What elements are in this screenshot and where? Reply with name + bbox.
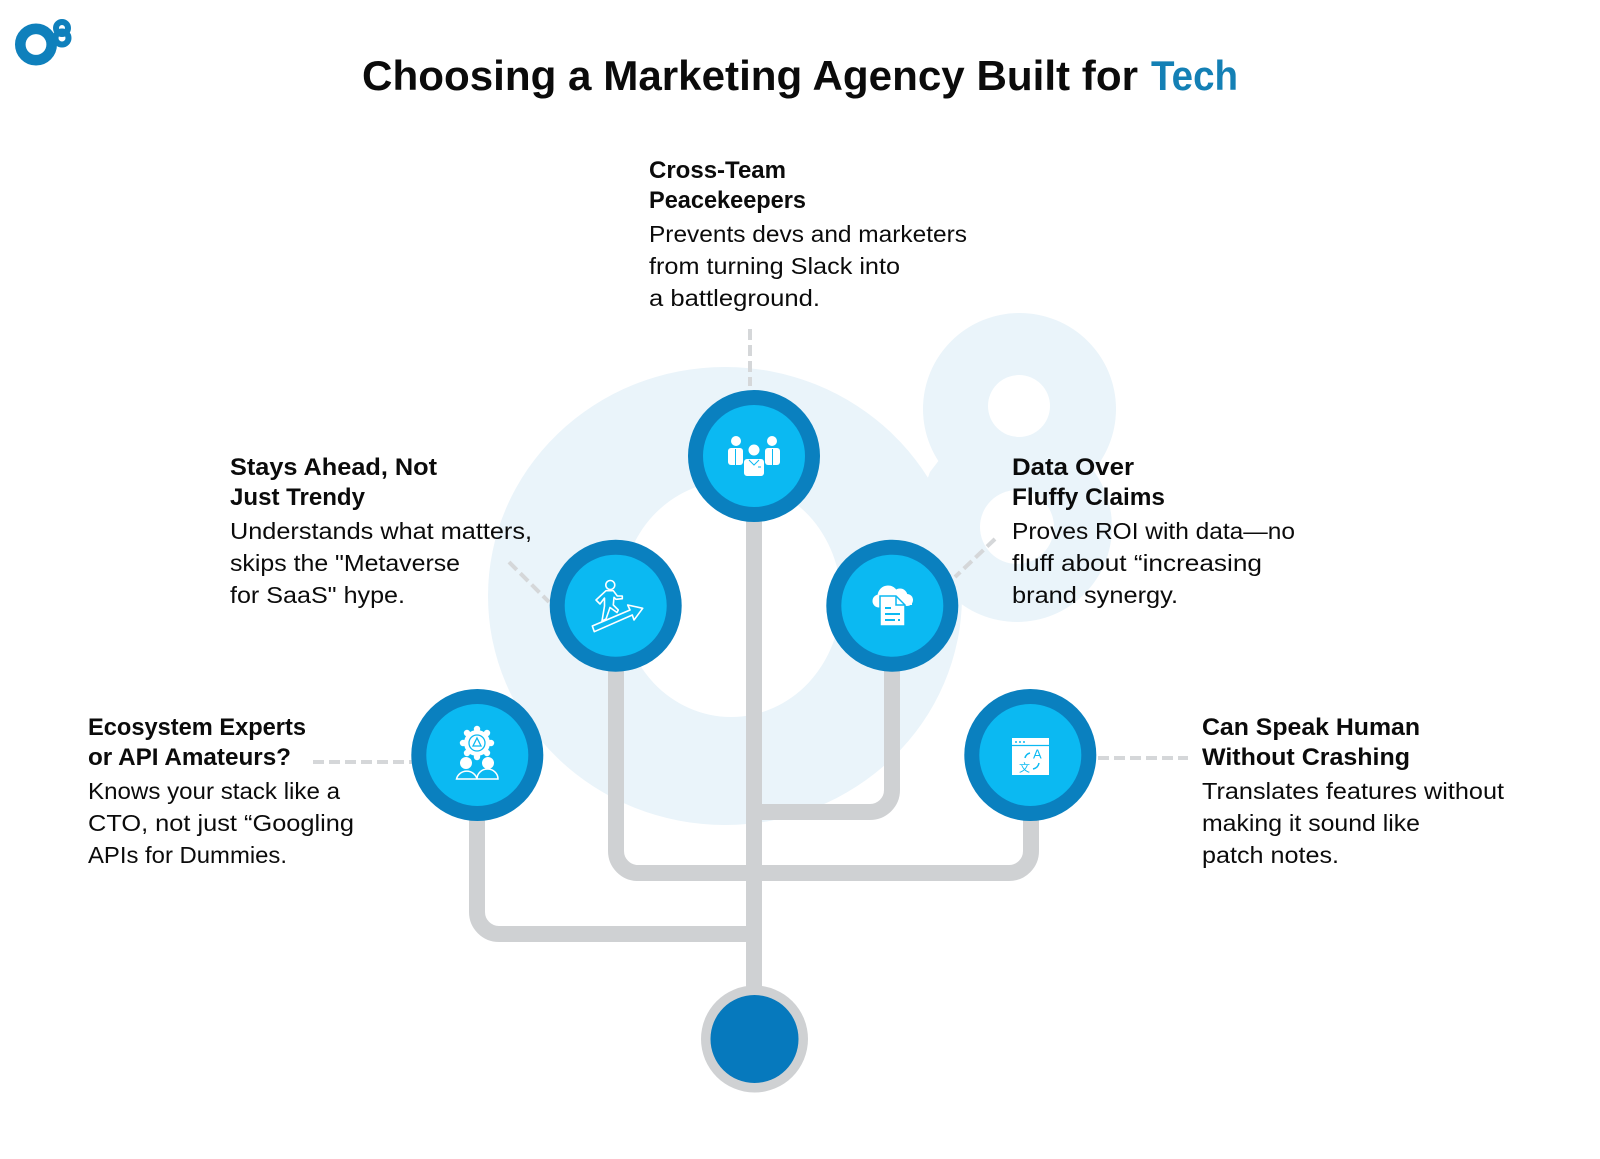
text: stays ahead: Just Trendy	[230, 484, 366, 511]
icon: translation window	[1012, 738, 1049, 775]
text: data over fluffy claims: brand synergy.	[1012, 582, 1178, 608]
text: data over fluffy claims: Proves ROI with data—no	[1012, 518, 1295, 544]
text: cross-team peacekeepers: a battleground.	[649, 285, 820, 311]
text: data over fluffy claims: Fluffy Claims	[1012, 484, 1165, 511]
text: ecosystem experts: CTO, not just “Googling	[88, 810, 354, 836]
text: ecosystem experts: or API Amateurs?	[88, 744, 291, 771]
node: data over fluffy claims	[826, 540, 958, 672]
logo	[20, 22, 68, 60]
icon: translation window: A	[1033, 746, 1042, 762]
text: stays ahead: for SaaS" hype.	[230, 582, 405, 608]
icon: three team members	[728, 436, 780, 476]
text: can speak human: Without Crashing	[1202, 744, 1410, 771]
text: can speak human: Can Speak Human	[1202, 714, 1420, 741]
text: stays ahead: Understands what matters,	[230, 518, 532, 544]
text: cross-team peacekeepers: Prevents devs and marketers	[649, 221, 967, 247]
text: can speak human	[1202, 714, 1505, 868]
node: ecosystem experts	[411, 689, 543, 821]
text: stays ahead: Stays Ahead, Not	[230, 454, 437, 481]
text: can speak human: Translates features without	[1202, 778, 1505, 804]
text: ecosystem experts: Knows your stack like a	[88, 778, 340, 804]
node: can speak human	[964, 689, 1096, 821]
tree connectors	[477, 456, 1031, 1039]
text: can speak human: making it sound like	[1202, 810, 1420, 836]
icon: person climbing arrow	[592, 580, 643, 632]
text: data over fluffy claims: fluff about “increasing	[1012, 550, 1262, 576]
text: cross-team peacekeepers: from turning Slack into	[649, 253, 900, 279]
icon: cloud and document	[872, 586, 913, 626]
background watermark logo	[488, 313, 1116, 825]
text: ecosystem experts: Ecosystem Experts	[88, 714, 306, 741]
node: cross-team peacekeepers	[688, 390, 820, 522]
text: can speak human: patch notes.	[1202, 842, 1339, 868]
text: stays ahead	[230, 454, 532, 608]
text: data over fluffy claims	[1012, 454, 1295, 608]
title: Choosing a Marketing Agency Built for	[362, 52, 1138, 99]
text: stays ahead: skips the "Metaverse	[230, 550, 460, 576]
title: Tech	[1151, 52, 1238, 99]
icon: gear and two people	[456, 726, 498, 779]
node: stays ahead	[550, 540, 682, 672]
icon: translation window: 文	[1019, 760, 1030, 774]
text: cross-team peacekeepers: Peacekeepers	[649, 187, 806, 214]
dashed leader lines	[313, 329, 1188, 762]
root node	[701, 986, 808, 1092]
text: ecosystem experts	[88, 714, 354, 868]
text: data over fluffy claims: Data Over	[1012, 454, 1134, 481]
text: cross-team peacekeepers	[649, 157, 967, 311]
text: ecosystem experts: APIs for Dummies.	[88, 842, 287, 868]
text: cross-team peacekeepers: Cross-Team	[649, 157, 786, 184]
